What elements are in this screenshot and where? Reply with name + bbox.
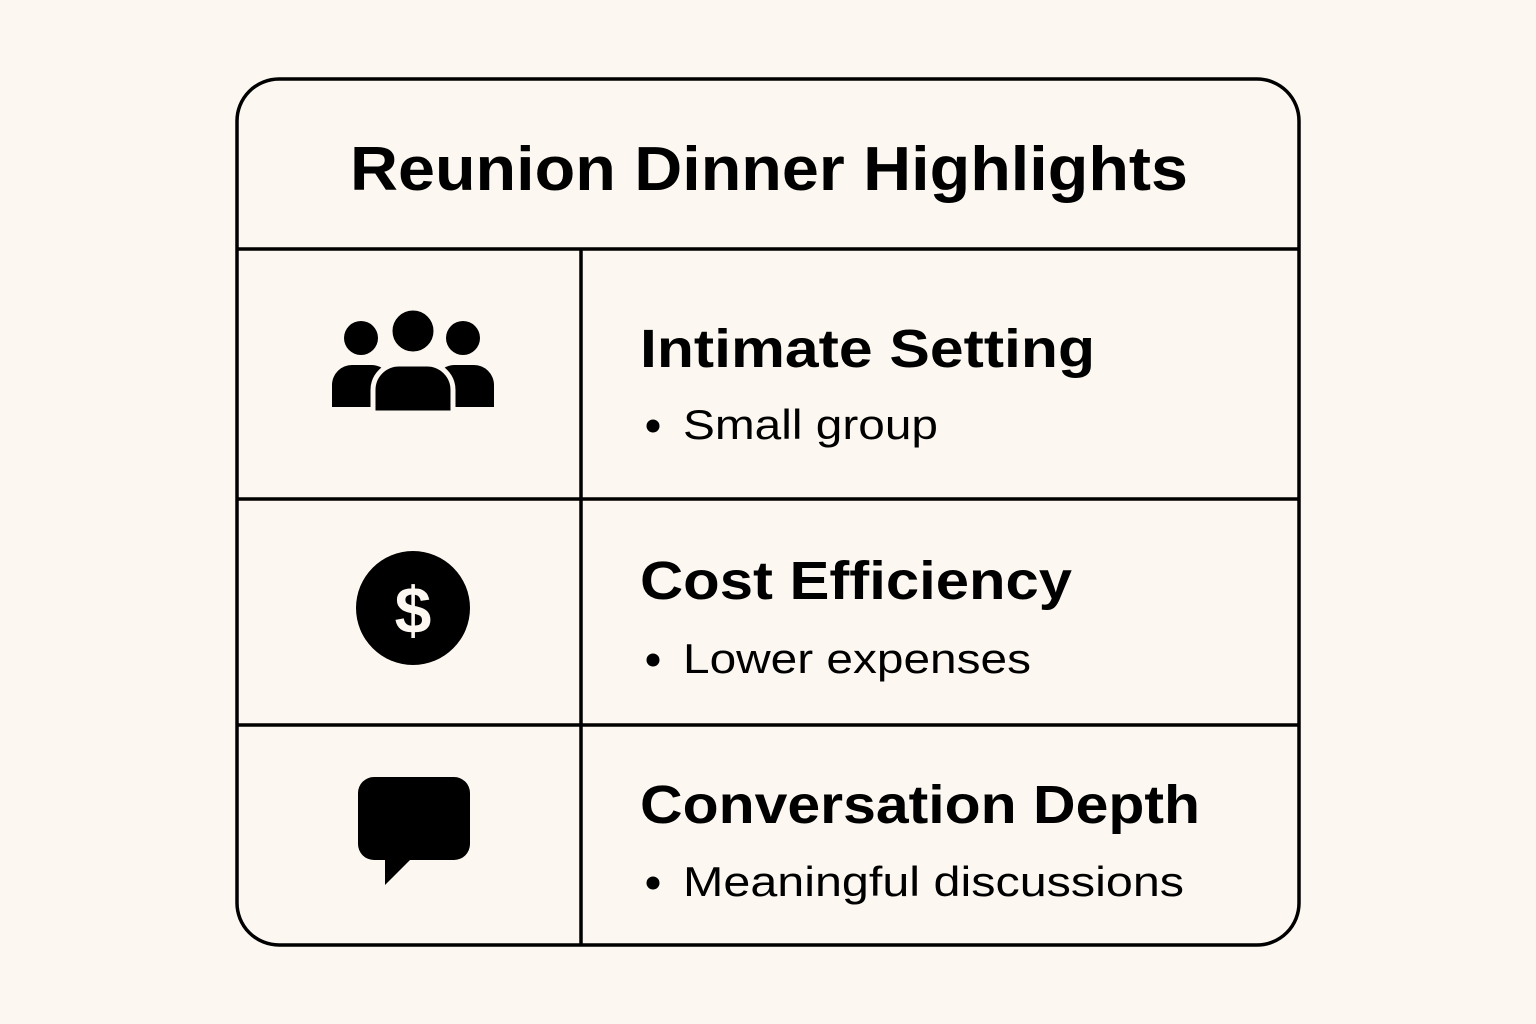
icon: dollar coin: $ — [395, 573, 431, 647]
panel: highlights table — [237, 79, 1299, 945]
title: Reunion Dinner Highlights — [350, 135, 1188, 204]
icon: people group — [332, 308, 494, 413]
heading: Intimate Setting: Intimate Setting — [640, 319, 1095, 379]
heading: Conversation Depth: Conversation Depth — [640, 775, 1200, 835]
bullet: Meaningful discussions: Meaningful discussions — [683, 858, 1184, 905]
icon: dollar coin — [356, 551, 470, 665]
bullet: Lower expenses: Lower expenses — [683, 635, 1031, 682]
heading: Cost Efficiency: Cost Efficiency — [640, 551, 1072, 611]
icon: speech bubble — [358, 777, 470, 885]
bullet: Small group: Small group — [683, 401, 938, 448]
